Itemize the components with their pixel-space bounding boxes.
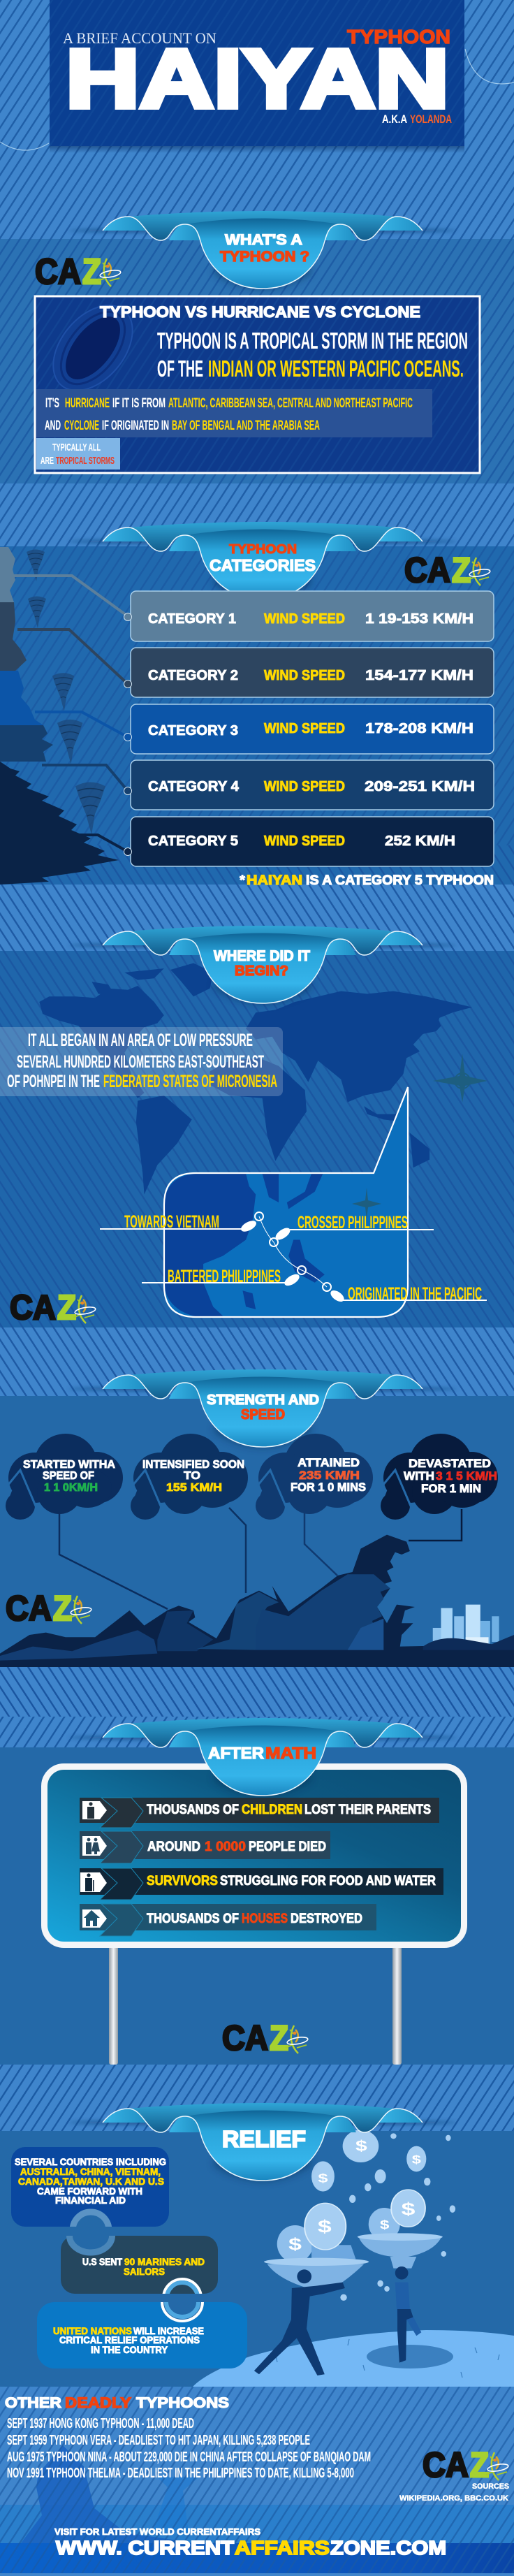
hurricane and cyclone band: IT'S [45,396,59,411]
cloud 2 [131,1434,248,1520]
logo: CA [423,2445,469,2484]
cloud 4: DEVASTATED [409,1457,491,1470]
track path with markers [240,1212,346,1304]
ribbon heading: strength and speed: STRENGTH AND [207,1392,319,1408]
category 5 row: CATEGORY 5 [148,834,238,849]
origin text panel [0,1027,283,1096]
website call to action [54,2526,446,2559]
cloud 3: ATTAINED [298,1456,360,1469]
track label: crossed philippines: CROSSED PHILIPPINES [298,1213,408,1232]
relief box: marines: 90 MARINES AND [124,2256,205,2267]
origin text panel: FEDERATED STATES OF MICRONESIA [103,1072,277,1091]
category 5 row: WIND SPEED [264,834,345,849]
ribbon: typhoon categories [68,522,457,599]
cloud 3 [256,1434,373,1520]
cloud 2: INTENSIFIED SOON [142,1459,244,1471]
ribbon heading: where did it begin [214,948,310,979]
aftermath row: people died: 1 0000 [205,1840,246,1854]
title panel: HAIYAN [66,32,449,126]
cloud 3: 235 KM/H [299,1469,360,1482]
ribbon heading: aftermath: AFTER [208,1744,264,1762]
logo [6,1589,92,1628]
dollar signs: $ [288,2235,302,2254]
relief illustration: people carrying money [254,2130,455,2375]
logo [222,2018,309,2058]
logo: Z [57,1289,76,1327]
category 1 row: WIND SPEED [264,611,345,627]
definition text: OF THE [157,356,203,381]
logo: Z [53,1589,72,1628]
cloud 1: 1 1 0KM/H [44,1482,98,1494]
icon: compass small [352,1188,381,1220]
category 5 row [131,817,494,866]
ribbon heading: typhoon categories: TYPHOON [229,542,297,556]
cloud 4: 3 1 5 KM/H [436,1469,497,1483]
logo: CA [10,1289,56,1327]
list of typhoons [7,2416,371,2481]
ribbon heading: typhoon categories [210,542,316,574]
track label: battered philippines: BATTERED PHILIPPINES [168,1267,281,1286]
cloud 2: TO [184,1470,200,1482]
logo [10,1289,96,1327]
connector lines from clouds to waves [59,1508,462,1609]
category 3 row: 178-208 KM/H [365,721,473,736]
relief box: financial aid [11,2147,169,2248]
category 1 row [131,591,494,641]
storm staircase silhouette [0,547,119,885]
relief box: financial aid: SEVERAL COUNTRIES INCLUDING [15,2156,166,2167]
person carrying right bowl [395,2266,421,2363]
right bowl with coins [358,2190,443,2269]
ribbon heading: where did it begin: WHERE DID IT [214,948,310,964]
aftermath row: survivors: SURVIVORS [147,1874,218,1889]
panel: typhoon vs hurricane vs cyclone [35,290,480,473]
heading: other deadly typhoons: OTHER [5,2395,61,2411]
ribbon heading: strength and speed: SPEED [241,1407,285,1422]
ribbon: what's a typhoon [68,211,457,289]
category 2 row: CATEGORY 2 [148,668,238,683]
ribbon heading: strength and speed [207,1392,319,1422]
ribbon: where did it begin [68,926,457,1003]
aftermath row: survivors [80,1868,443,1900]
ribbon heading: what's a typhoon: WHAT'S A [225,232,302,248]
title panel [0,0,514,153]
website call to action: WWW. CURRENT [56,2537,234,2559]
category note: IS A CATEGORY 5 TYPHOON [306,873,494,888]
category 1 row: CATEGORY 1 [148,611,236,627]
aftermath row: survivors: STRUGGLING FOR FOOD AND WATER [220,1874,436,1889]
ribbon heading: what's a typhoon: TYPHOON ? [220,249,309,265]
aftermath row: people died: AROUND [147,1840,200,1854]
category 2 row: 154-177 KM/H [365,668,473,683]
ribbon heading: relief: RELIEF [222,2126,306,2152]
hurricane and cyclone band: HURRICANE [65,396,110,411]
category 2 row [131,648,494,697]
hurricane and cyclone band: IF IT IS FROM [112,396,166,411]
relief box: united nations: CRITICAL RELIEF OPERATIONS [59,2334,200,2345]
tropical storms box: TROPICAL STORMS [56,455,115,467]
dollar signs [288,2137,422,2254]
list of typhoons: SEPT 1937 HONG KONG TYPHOON - 11,000 DEAD [7,2416,194,2431]
hurricane and cyclone band: BAY OF BENGAL AND THE ARABIA SEA [172,419,320,433]
logo: Z [470,2445,489,2484]
relief box: financial aid: CANADA,TAIWAN, U.K AND U.S [18,2176,164,2187]
tornado icons [27,549,105,835]
origin text panel: OF POHNPEI IN THE [7,1072,100,1091]
left bowl with coins [264,2203,369,2290]
logo [423,2445,509,2484]
title panel: TYPHOON [347,26,450,48]
icon: adults [86,1838,100,1854]
icon: child [87,1802,94,1819]
logo [404,551,491,590]
heading: other deadly typhoons [5,2395,229,2411]
category note: * [240,873,246,888]
cloud 1 [6,1434,123,1520]
callout map of the track [164,1087,408,1317]
ribbon heading: where did it begin: BEGIN? [235,963,288,979]
category 5 row: 252 KM/H [385,834,455,849]
icon: elder [85,1873,94,1891]
category 3 row [131,704,494,754]
aftermath row: houses: HOUSES [242,1912,288,1926]
logo: Z [82,252,101,291]
website call to action: AFFAIRS [235,2537,330,2559]
logo: Z [452,551,471,590]
relief box: financial aid: FINANCIAL AID [55,2195,126,2206]
connectors from storm to rows [10,576,131,855]
relief box: marines [61,2236,218,2317]
dollar signs: $ [412,2154,422,2167]
city skyline [423,1605,514,1650]
category 4 row: 209-251 KM/H [365,779,475,794]
hurricane and cyclone band: IF ORIGINATED IN [102,419,169,433]
panel heading: TYPHOON VS HURRICANE VS CYCLONE [100,303,420,321]
ground hill [193,2330,514,2387]
category 1 row: 1 19-153 KM/H [365,611,473,627]
dollar signs: $ [380,2218,390,2232]
logo: CA [35,252,81,291]
world map [39,963,472,1194]
relief box: united nations [37,2302,247,2368]
relief box: united nations: IN THE COUNTRY [91,2344,168,2355]
category 3 row: CATEGORY 3 [148,723,238,738]
cloud 2: 155 KM/H [166,1482,222,1494]
ribbon: strength and speed [68,1369,457,1447]
title panel: A BRIEF ACCOUNT ON [63,29,216,47]
cloud 1: STARTED WITHA [23,1459,115,1471]
ribbon heading: aftermath [208,1744,316,1762]
category 2 row: WIND SPEED [264,668,345,683]
dollar signs: $ [402,2199,415,2219]
aftermath row: children [80,1798,439,1828]
aftermath row: children: CHILDREN [242,1803,302,1817]
icon: storm swirl [38,290,148,406]
category note: HAIYAN [247,873,302,888]
cloud 1: SPEED OF [43,1470,94,1482]
aftermath row: children: THOUSANDS OF [147,1803,239,1817]
cloud 4 [381,1434,498,1520]
cloud 4: WITH [404,1469,434,1483]
aftermath row: people died: PEOPLE DIED [249,1840,326,1854]
sources [399,2482,509,2503]
relief box: financial aid: CAME FORWARD WITH [37,2185,142,2197]
ribbon heading: aftermath: MATH [265,1744,316,1762]
aftermath row: houses: DESTROYED [291,1912,362,1926]
cloud 3: FOR 1 0 MINS [291,1480,366,1494]
category 4 row: CATEGORY 4 [148,779,240,794]
ribbon heading: what's a typhoon [220,232,309,265]
relief box: united nations: UNITED NATIONS [53,2325,132,2336]
website call to action: VISIT FOR LATEST WORLD CURRENTAFFAIRS [54,2526,260,2537]
category 4 row: WIND SPEED [264,779,345,794]
aftermath row: people died [80,1831,330,1863]
footer background [0,2387,514,2573]
hurricane and cyclone band: AND [45,419,61,433]
heading: other deadly typhoons: TYPHOONS [136,2395,229,2411]
billboard panel [45,1766,464,1945]
ribbon: aftermath [68,1718,457,1796]
person carrying left bowl [254,2269,345,2375]
aftermath row: houses [80,1904,376,1936]
category 3 row: WIND SPEED [264,721,345,736]
category 4 row [131,760,494,810]
hurricane and cyclone band [36,389,432,437]
icon: house [84,1910,100,1926]
icon: compass large [433,1054,487,1103]
relief box: marines: U.S SENT [82,2256,122,2267]
title panel: YOLANDA [410,112,452,126]
dollar signs: $ [318,2171,328,2185]
relief box: marines: SAILORS [124,2266,165,2277]
aftermath row: children: LOST THEIR PARENTS [304,1803,431,1817]
logo: CA [6,1589,52,1628]
logo: CA [222,2018,268,2058]
website call to action: ZONE.COM [330,2537,446,2559]
tropical storms box [36,438,120,470]
logo [35,252,122,291]
title panel: A.K.A [382,112,407,126]
cloud 4: FOR 1 MIN [421,1482,481,1495]
relief box: financial aid: AUSTRALIA, CHINA, VIETNAM, [20,2166,161,2177]
definition text [157,328,468,381]
origin text panel: IT ALL BEGAN IN AN AREA OF LOW PRESSURE [28,1031,253,1050]
origin text panel: SEVERAL HUNDRED KILOMETERS EAST-SOUTHEAST [17,1052,264,1072]
logo: Z [270,2018,288,2058]
logo: CA [404,551,450,590]
sources: SOURCES [472,2482,509,2491]
billboard posts [109,1946,402,2065]
hurricane and cyclone band: CYCLONE [64,419,99,433]
ribbon heading: typhoon categories: CATEGORIES [210,556,316,574]
waves silhouette [0,1535,514,1667]
tropical storms box: TYPICALLY ALL [52,442,101,453]
track label: towards vietnam: TOWARDS VIETNAM [124,1212,219,1232]
tropical storms box: ARE [41,455,54,467]
relief box: united nations: WILL INCREASE [133,2325,204,2336]
floating coins [311,2130,455,2301]
ribbon: relief [68,2103,457,2181]
heading: other deadly typhoons: DEADLY [65,2395,131,2411]
aftermath row: houses: THOUSANDS OF [147,1912,239,1926]
dollar signs: $ [355,2137,367,2154]
dollar signs: $ [318,2216,332,2236]
sources: WIKIPEDIA.ORG, BBC.CO.UK [399,2494,508,2503]
